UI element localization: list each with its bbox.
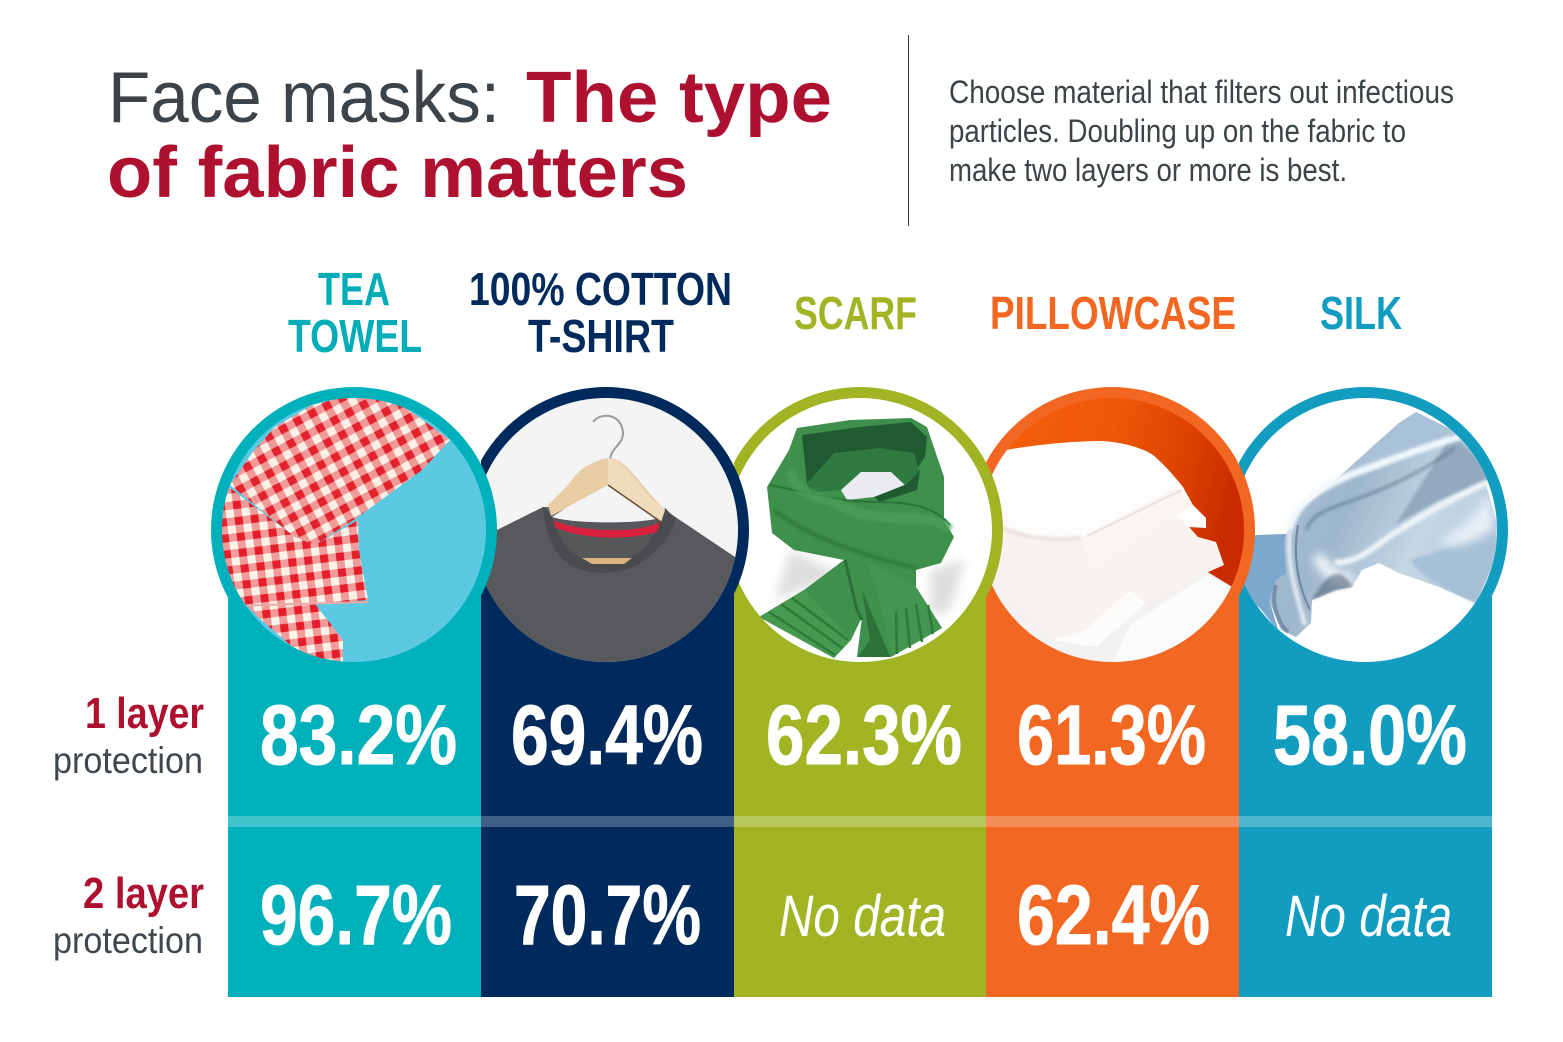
- column: t-shirt bar: [481, 560, 734, 997]
- intro text: [949, 74, 1454, 188]
- values: 2 layer: No data: [1285, 884, 1452, 949]
- column: scarf bar: [734, 560, 986, 997]
- row label: 2 layer protection: [53, 869, 204, 961]
- intro text: make two layers or more is best.: [949, 152, 1347, 188]
- icon: t-shirt photo: [481, 387, 749, 662]
- heading: cotton t-shirt: T-SHIRT: [528, 310, 674, 362]
- values: 1 layer: [260, 688, 1467, 782]
- title: of fabric matters: [107, 133, 688, 213]
- heading: cotton t-shirt: 100% COTTON: [469, 263, 732, 315]
- intro text: particles. Doubling up on the fabric to: [949, 113, 1406, 149]
- column: pillowcase bar: [986, 560, 1239, 997]
- heading: tea towel: [288, 263, 422, 362]
- values: 2 layer: 62.4%: [1017, 868, 1210, 962]
- heading: silk: SILK: [1320, 287, 1402, 339]
- heading: pillowcase: PILLOWCASE: [990, 287, 1236, 339]
- values: 2 layer: 96.7%: [260, 868, 452, 962]
- heading: scarf: SCARF: [794, 287, 917, 339]
- title: [107, 58, 832, 213]
- intro text: Choose material that filters out infectious: [949, 74, 1454, 110]
- row label: 1 layer protection: 1 layer: [85, 689, 204, 738]
- heading: cotton t-shirt: [469, 263, 732, 362]
- title: The type: [526, 58, 832, 138]
- heading: tea towel: TOWEL: [288, 310, 422, 362]
- icon: pillow photo: [986, 387, 1255, 662]
- values: 2 layer: No data: [779, 884, 946, 949]
- row label: 1 layer protection: [53, 689, 204, 781]
- values: 2 layer: 70.7%: [514, 868, 701, 962]
- values: 1 layer: 69.4%: [511, 688, 703, 782]
- icon: tea towel photo: [210, 387, 497, 673]
- row label: 2 layer protection: protection: [53, 920, 203, 961]
- icon: silk photo: [1222, 387, 1508, 673]
- values: 1 layer: 83.2%: [260, 688, 457, 782]
- row label: 2 layer protection: 2 layer: [83, 869, 204, 918]
- column: silk bar: [1239, 560, 1492, 997]
- row label: 1 layer protection: protection: [53, 740, 203, 781]
- values: 1 layer: 61.3%: [1017, 688, 1206, 782]
- title: Face masks:: [108, 58, 500, 138]
- values: 2 layer: [260, 868, 1452, 962]
- column: tea towel bar: [228, 560, 481, 997]
- icon: scarf photo: [717, 387, 1003, 673]
- values: 1 layer: 58.0%: [1273, 688, 1467, 782]
- heading: tea towel: TEA: [318, 263, 390, 315]
- values: 1 layer: 62.3%: [766, 688, 962, 782]
